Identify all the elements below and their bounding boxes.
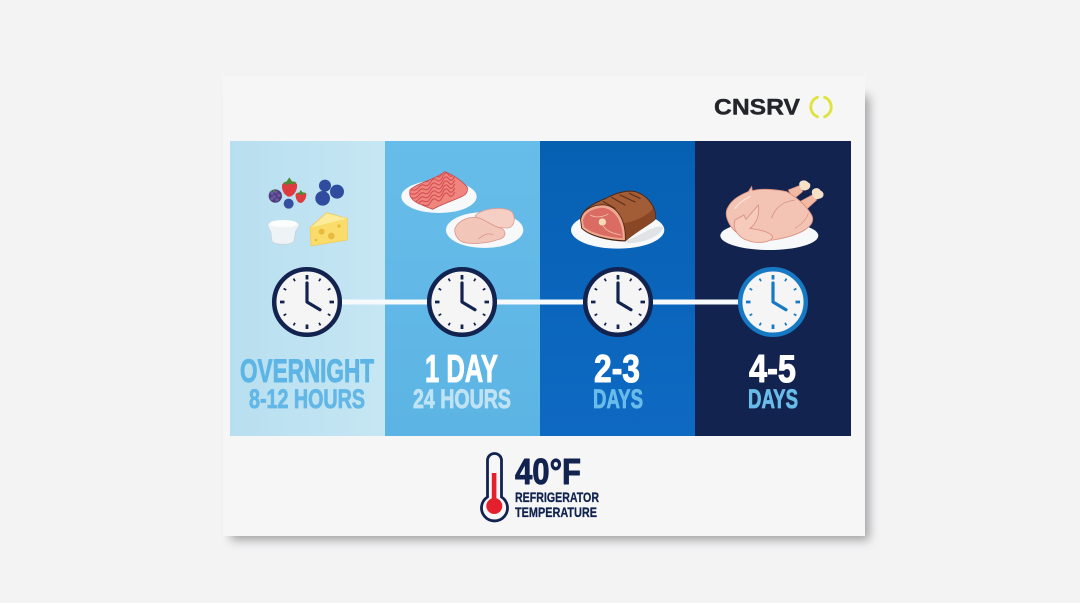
icon: clock overnight bbox=[274, 269, 340, 335]
icon: clock 2-3 days bbox=[585, 269, 651, 335]
panel background bbox=[230, 141, 385, 436]
icon: roast on plate bbox=[571, 191, 664, 249]
card shadow bbox=[231, 96, 869, 540]
panel: overnight bbox=[230, 141, 385, 436]
panel: 1 day bbox=[385, 141, 540, 436]
icon: ground meat and chicken breast bbox=[401, 171, 524, 248]
temperature value: 40°F bbox=[515, 451, 581, 492]
card bbox=[223, 76, 865, 536]
label: 4-5: 4-5 bbox=[749, 348, 796, 391]
panel background bbox=[385, 141, 540, 436]
temperature caption line 1: REFRIGERATOR bbox=[515, 489, 599, 505]
icon: clock 1 day bbox=[429, 269, 495, 335]
panel background bbox=[695, 141, 851, 436]
icon: clock 4-5 days bbox=[740, 269, 806, 335]
temperature caption line 2: TEMPERATURE bbox=[515, 504, 597, 520]
icon: whole chicken on plate bbox=[720, 180, 824, 250]
logo: CNSRV bbox=[714, 94, 831, 120]
label: 8-12 hours: 8-12 HOURS bbox=[249, 384, 365, 414]
label: days: DAYS bbox=[748, 384, 798, 414]
label: days: DAYS bbox=[593, 384, 643, 414]
timeline connector bbox=[340, 300, 740, 304]
logo wordmark: CNSRV bbox=[714, 94, 800, 120]
label: 24 hours: 24 HOURS bbox=[413, 384, 511, 414]
panel: 2-3 days bbox=[540, 141, 695, 436]
panel background bbox=[540, 141, 695, 436]
icon: thermometer bbox=[481, 454, 507, 521]
label: overnight: OVERNIGHT bbox=[240, 353, 374, 389]
icon: berries and dairy bbox=[268, 177, 347, 246]
logo ring bbox=[811, 97, 831, 117]
label: 2-3: 2-3 bbox=[594, 348, 640, 391]
panel: 4-5 days bbox=[695, 141, 851, 436]
temperature callout bbox=[515, 451, 599, 520]
label: 1 day: 1 DAY bbox=[425, 348, 498, 391]
